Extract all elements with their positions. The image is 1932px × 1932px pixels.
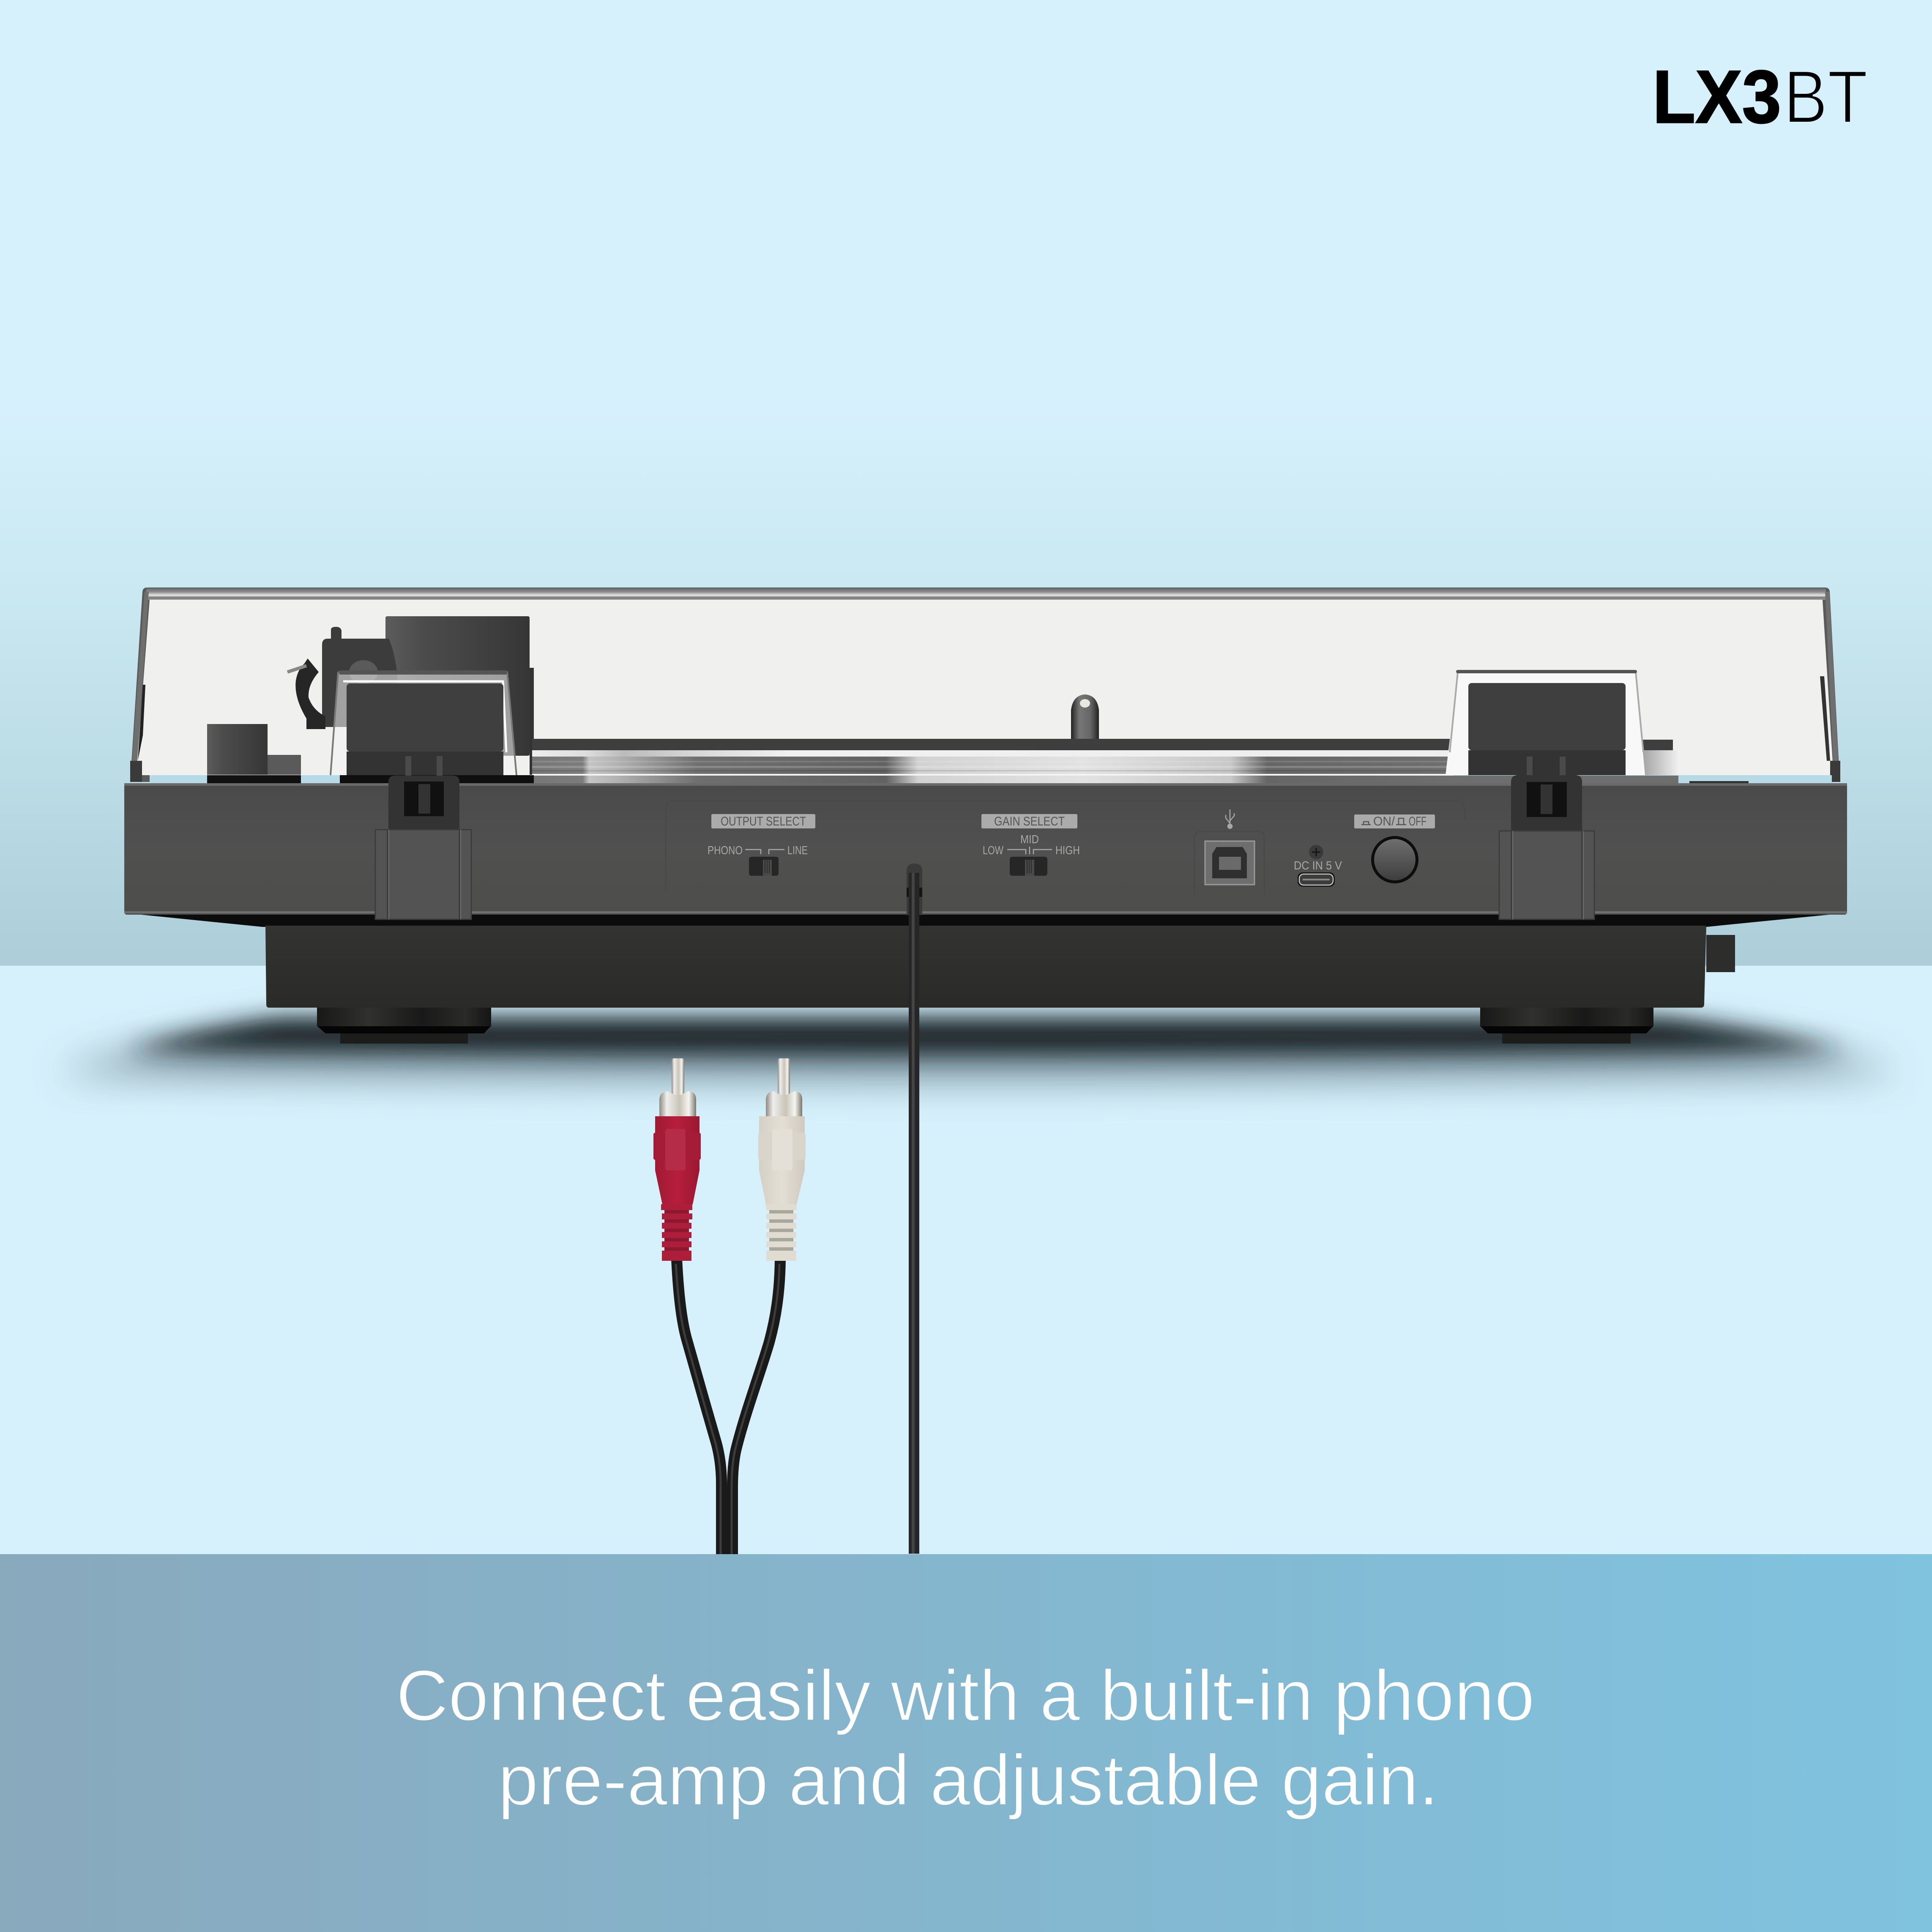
tonearm counterweight (287, 616, 534, 775)
gain select controls: MID (1020, 833, 1039, 846)
rca cables (676, 1260, 780, 1555)
gap strip showing background (150, 775, 1832, 783)
icon: usb symbol (1226, 809, 1234, 828)
background floor (0, 966, 1932, 1558)
left hinge plate (375, 830, 471, 919)
left foot (317, 1008, 491, 1044)
usb-c port (1298, 872, 1335, 887)
right hinge plate (1499, 831, 1594, 919)
caption text: Connect easily with a built-in phono (396, 1656, 1535, 1736)
on off label (1354, 814, 1435, 828)
caption banner (0, 1554, 1932, 1932)
spindle (1071, 694, 1099, 739)
output select controls (708, 814, 815, 876)
plinth (124, 783, 1847, 915)
right hinge clip (1511, 775, 1582, 831)
background wall (0, 0, 1932, 966)
model name (1653, 55, 1868, 139)
caption text (396, 1656, 1535, 1820)
left lid hinge block (331, 670, 534, 783)
gain select controls: HIGH (1055, 844, 1080, 857)
model name: LX3 (1653, 55, 1781, 139)
phono output cable with plug (907, 864, 922, 1554)
on off label: OFF (1409, 814, 1426, 828)
left hinge clip (388, 776, 459, 831)
caption text: pre-amp and adjustable gain. (498, 1740, 1439, 1820)
usb-b port (1194, 831, 1264, 895)
power button (1371, 836, 1418, 883)
output select controls: LINE (787, 844, 808, 857)
screw (1309, 845, 1323, 859)
platter (532, 739, 1749, 783)
lower body (265, 926, 1735, 1008)
red rca plug (653, 1058, 701, 1261)
output select controls: OUTPUT SELECT (721, 814, 806, 828)
right foot (1480, 1008, 1653, 1044)
output select controls: PHONO (708, 844, 743, 857)
floor shadow (55, 1019, 1902, 1080)
white rca plug (758, 1058, 806, 1261)
small cylinder (207, 724, 301, 783)
gain select controls: LOW (983, 844, 1003, 857)
turntable (124, 588, 1847, 1554)
plinth underside band (124, 913, 1846, 927)
on off label: ON/ (1373, 814, 1395, 828)
dc in label: DC IN 5 V (1294, 859, 1342, 872)
gain select controls: GAIN SELECT (994, 814, 1065, 828)
model name: BT (1784, 55, 1868, 139)
gain select controls (981, 814, 1080, 876)
right lid hinge block (1446, 670, 1645, 775)
dust cover (130, 588, 1840, 782)
